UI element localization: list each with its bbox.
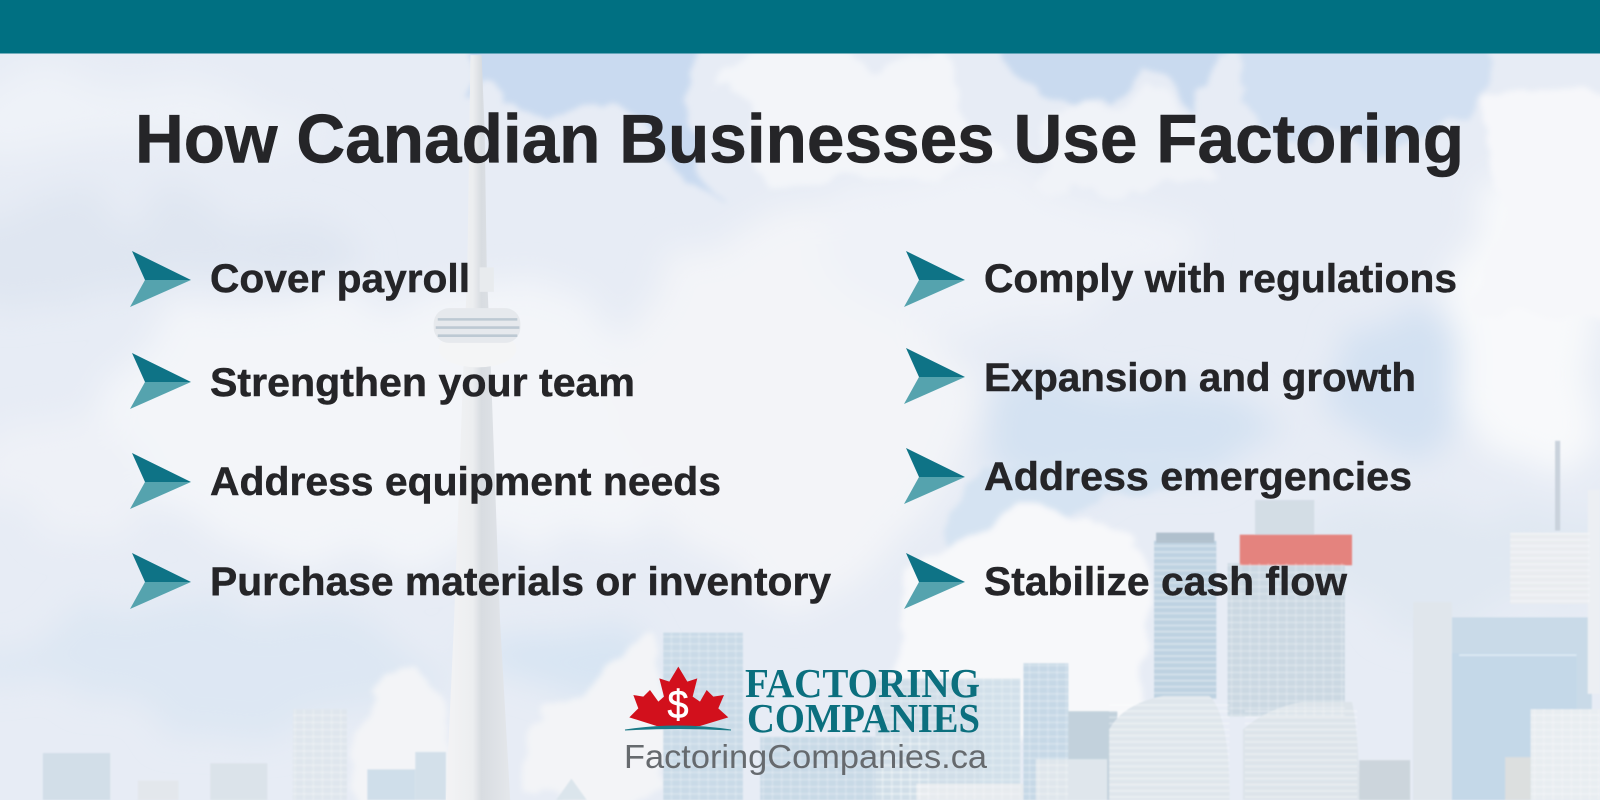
icon: maple leaf with dollar sign (625, 667, 731, 730)
item: address equipment needs: Address equipment needs (210, 460, 721, 504)
item: strengthen your team (130, 353, 635, 409)
logo (624, 660, 988, 775)
item: stabilize cash flow: Stabilize cash flow (984, 560, 1347, 604)
background: CN Tower (434, 55, 520, 800)
item: comply with regulations: Comply with regulations (984, 257, 1457, 301)
right list (904, 251, 1457, 609)
icon: maple leaf with dollar sign: $ (668, 683, 688, 727)
background: city skyline (43, 441, 1600, 800)
item: purchase materials (130, 553, 831, 609)
logo: COMPANIES (747, 695, 980, 741)
header bar (0, 0, 1600, 54)
item: cover payroll: Cover payroll (210, 257, 470, 301)
item: address emergencies: Address emergencies (984, 455, 1412, 499)
item: address equipment needs (130, 453, 721, 509)
item: cover payroll (130, 251, 470, 307)
item: expansion and growth: Expansion and growth (984, 356, 1416, 400)
item: stabilize cash flow (904, 553, 1347, 609)
title: How Canadian Businesses Use Factoring (135, 100, 1464, 178)
item: strengthen your team: Strengthen your team (210, 361, 635, 405)
item: expansion and growth (904, 348, 1416, 404)
item: purchase materials: Purchase materials or inventory (210, 560, 831, 604)
left list (130, 251, 831, 609)
item: comply with regulations (904, 251, 1457, 307)
wordmark: FACTORING (745, 660, 980, 706)
item: address emergencies (904, 448, 1412, 504)
website url: FactoringCompanies.ca (624, 738, 988, 775)
